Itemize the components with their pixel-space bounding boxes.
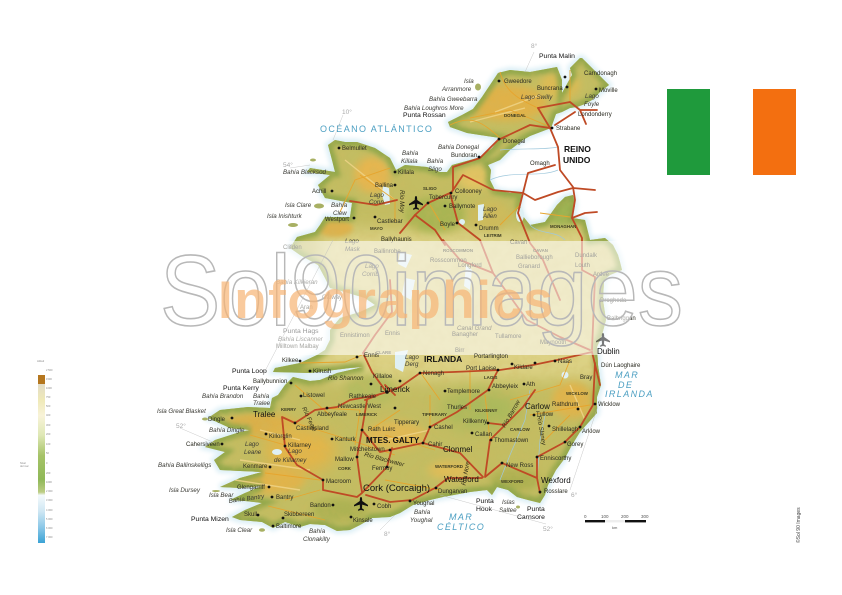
Midlands and south labels: Bandon (310, 503, 331, 509)
Midlands and south labels: Kenmare (243, 464, 268, 470)
cities and bays of the north: Arranmore (441, 86, 472, 93)
legend: elevation scale: 1000 (46, 386, 52, 390)
Midlands and south labels: Gorey (567, 442, 583, 448)
faded labels: Ballinrobe (374, 249, 401, 255)
Midlands and south labels: Bahía Bantry (228, 493, 266, 505)
land cover fade band (150, 241, 630, 355)
Midlands and south labels: Waterford (444, 475, 479, 484)
cities and bays of the north: Río Moy (398, 190, 405, 214)
Midlands and south labels: 52° (543, 525, 553, 533)
cities and bays of the north: UNIDO (563, 155, 591, 165)
Midlands and south labels: Abbeyfeale (317, 412, 348, 418)
Midlands and south labels: 6° (571, 491, 578, 499)
faded labels (276, 238, 636, 355)
cities and bays of the north: Sligo (428, 166, 442, 173)
cities and bays of the north: Bahía Donegal (438, 144, 480, 151)
cities and bays of the north: Castlebar (377, 219, 403, 225)
Midlands and south labels: Punta Mizen (191, 516, 229, 523)
Midlands and south labels: Bantry (276, 495, 293, 501)
legend: elevation scale: 100 (46, 442, 51, 446)
map: Ireland physical map (200, 50, 630, 540)
faded labels: Birr (455, 348, 464, 354)
cities and bays of the north: Buncrana (537, 86, 563, 92)
cities and bays of the north: Lago (483, 206, 497, 213)
Midlands and south labels: LIMERICK (356, 412, 378, 417)
Midlands and south labels: Kanturk (335, 437, 357, 443)
Midlands and south labels: Dublin (597, 347, 620, 356)
Midlands and south labels: Punta (527, 506, 545, 513)
legend: elevation scale: 4 000 (46, 508, 53, 512)
Midlands and south labels: Dungarvan (438, 489, 467, 495)
cities and bays of the north: Gweedore (504, 79, 532, 85)
Midlands and south labels: New Ross (506, 463, 533, 469)
faded labels: Tullamore (495, 334, 522, 340)
legend: elevation scale: 1000 (46, 480, 52, 484)
Midlands and south labels: Wicklow (598, 402, 621, 408)
water labels: MAR (449, 512, 473, 522)
Midlands and south labels: Bahía Brandon (202, 393, 244, 400)
Midlands and south labels: Youghal (413, 501, 434, 507)
faded labels: Cavan (510, 240, 527, 246)
legend: elevation scale (20, 359, 53, 543)
land relief (200, 50, 630, 540)
Midlands and south labels: Macroom (326, 479, 351, 485)
cities and bays of the north: DONEGAL (504, 113, 526, 118)
Midlands and south labels: Lago (288, 448, 302, 455)
Midlands and south labels: Isla Clear (226, 527, 253, 534)
cities and bays of the north: REINO (564, 144, 591, 154)
water labels (320, 124, 654, 532)
Midlands and south labels: Bahía (414, 509, 431, 516)
Midlands and south labels: Bray (580, 375, 592, 381)
Midlands and south labels: Carnsore (517, 514, 545, 521)
cities and bays of the north: Clew (333, 210, 347, 217)
Midlands and south labels: Newcastle West (338, 404, 381, 410)
cities and bays of the north: Ballyhaunis (381, 237, 412, 243)
Midlands and south labels: TIPPERARY (422, 412, 447, 417)
Midlands and south labels: Shillelagh (552, 427, 578, 433)
cities and bays of the north: LEITRIM (484, 233, 502, 238)
islands (202, 84, 520, 532)
faded labels: Lago (345, 238, 359, 245)
Midlands and south labels: CORK (338, 466, 352, 471)
faded labels: CLARE (376, 350, 391, 355)
Midlands and south labels: Bahía (253, 393, 270, 400)
Midlands and south labels: Fermoy (372, 466, 392, 472)
Midlands and south labels: Isla Bear (209, 492, 234, 499)
cities and bays of the north: Donegal (503, 139, 525, 145)
scale bar: 0 (584, 514, 587, 519)
cities and bays of the north: Belmullet (342, 146, 367, 152)
Midlands and south labels: Rosslare (544, 489, 568, 495)
Midlands and south labels: Listowel (303, 393, 325, 399)
cities and bays of the north: Omagh (530, 161, 550, 167)
faded labels: Clifden (283, 245, 302, 251)
faded labels: Banagher (452, 332, 478, 338)
Midlands and south labels: Isla Great Blasket (157, 408, 206, 415)
Midlands and south labels: Thomastown (494, 438, 528, 444)
faded labels: Ennis (385, 331, 400, 337)
Midlands and south labels: Arklow (582, 429, 601, 435)
cities and bays of the north: Allen (482, 213, 497, 220)
Midlands and south labels: Bahía (309, 528, 326, 535)
cities and bays of the north: Isla (464, 78, 474, 85)
cities and bays of the north: Ballymote (449, 204, 476, 210)
Midlands and south labels: Callan (475, 432, 492, 438)
cities and bays of the north: Bahía (427, 158, 444, 165)
legend: elevation scale: 2 000 (46, 489, 53, 493)
cities and bays of the north: Lago (585, 93, 599, 100)
Midlands and south labels: Cashel (434, 425, 453, 431)
Midlands and south labels: Río Nore (460, 460, 472, 486)
Midlands and south labels: Tralee (253, 410, 276, 419)
legend: elevation scale: 7 000 (46, 535, 53, 539)
Midlands and south labels: 52° (176, 422, 186, 430)
Midlands and south labels: Islas (502, 499, 515, 506)
legend: elevation scale: del mar (20, 464, 29, 468)
Midlands and south labels: Skull (244, 512, 257, 518)
Midlands and south labels (157, 347, 641, 543)
Midlands and south labels: Ennis (364, 353, 379, 359)
faded labels: Mask (345, 246, 361, 253)
faded labels: Ennistimon (340, 333, 370, 339)
Midlands and south labels: Naas (558, 359, 572, 365)
legend: elevation scale: 500 (46, 404, 51, 408)
Midlands and south labels: Derg (405, 361, 419, 368)
Midlands and south labels: Thurles (447, 405, 467, 411)
scale bar: km (612, 525, 618, 530)
Midlands and south labels: Castleisland (296, 426, 329, 432)
legend: elevation scale: 1500 (46, 377, 52, 381)
watermark: Sol90images outline: Sol90images (160, 235, 683, 347)
Midlands and south labels: Nenagh (423, 371, 444, 377)
Midlands and south labels: Tipperary (394, 420, 419, 426)
legend: elevation scale: Altitud (37, 359, 45, 363)
cities and bays of the north: Bahía Blacksod (283, 169, 327, 176)
faded labels: Balbriggan (607, 316, 636, 322)
Midlands and south labels: Cork (Corcaigh) (363, 483, 430, 494)
Midlands and south labels: Glengarriff (237, 485, 265, 491)
Midlands and south labels: Kilrush (313, 369, 331, 375)
Midlands and south labels: Lago (405, 354, 419, 361)
Midlands and south labels: Isla Dursey (169, 487, 201, 494)
scale bar (584, 514, 649, 530)
Midlands and south labels: Rathdrum (552, 402, 578, 408)
Midlands and south labels: Dingle (208, 417, 226, 423)
Midlands and south labels: Cobh (377, 504, 391, 510)
Midlands and south labels: Port Laoise (466, 366, 497, 372)
faded labels: Drogheda (600, 298, 627, 304)
cities and bays of the north: Collooney (455, 189, 482, 195)
Midlands and south labels: KERRY (281, 407, 296, 412)
faded labels: Galway (322, 295, 342, 301)
legend: elevation scale: 3 000 (46, 498, 53, 502)
Midlands and south labels: Punta (476, 498, 494, 505)
Midlands and south labels: Youghal (410, 517, 433, 524)
legend: elevation scale: Nivel (20, 461, 26, 465)
cities and bays of the north: Punta Malin (539, 53, 575, 60)
graticule lines (180, 52, 600, 530)
cities and bays of the north: Isla Clare (285, 202, 312, 209)
legend: elevation scale: 2 500 (46, 368, 53, 372)
Midlands and south labels: Rathkeale (349, 394, 377, 400)
cities and bays of the north: Londonderry (578, 112, 612, 118)
icon: airports (354, 196, 610, 511)
faded labels: CAVAN (533, 248, 548, 253)
cities and bays of the north: Bahía (402, 150, 419, 157)
faded labels: Granard (518, 264, 540, 270)
Midlands and south labels: WICKLOW (566, 391, 589, 396)
water labels: MAR (615, 370, 639, 380)
Midlands and south labels: 8° (384, 530, 391, 538)
Midlands and south labels: Río Feale (300, 406, 318, 433)
scale bar: 100 (601, 514, 609, 519)
cities and bays of the north: MAYO (370, 226, 383, 231)
main roads (282, 102, 600, 502)
Midlands and south labels: Tralee (253, 400, 271, 407)
Midlands and south labels: Abbeyleix (492, 384, 518, 390)
water labels: OCÉANO ATLÁNTICO (320, 124, 433, 134)
cities and bays of the north: Moville (599, 88, 618, 94)
Midlands and south labels: Clonakilty (303, 536, 331, 543)
Midlands and south labels: Cahir (428, 442, 442, 448)
place labels: north and west (150, 42, 654, 543)
legend: elevation scale: 200 (46, 432, 51, 436)
cities and bays of the north: Tobercurry (429, 195, 457, 201)
Midlands and south labels: Ballybunnion (253, 379, 287, 385)
Midlands and south labels: Cahersiveen (186, 442, 220, 448)
cities and bays of the north: Achill (312, 189, 326, 195)
cities and bays of the north: Conn (369, 199, 384, 206)
faded labels: Longford (458, 263, 482, 269)
faded labels: Punta Hags (283, 328, 319, 335)
Midlands and south labels: Tullow (536, 412, 554, 418)
Midlands and south labels: Killaloe (373, 374, 393, 380)
cities and bays of the north: Lago Swilly (521, 94, 553, 101)
Midlands and south labels: Ath (526, 382, 535, 388)
water labels: DE (618, 380, 633, 390)
faded labels: Louth (575, 263, 590, 269)
Midlands and south labels: Río Shannon (328, 375, 364, 382)
cities and bays of the north: MONAGHAN (550, 224, 576, 229)
credit: ©Sol 90 Images (795, 507, 802, 543)
Midlands and south labels: Hook (476, 506, 492, 513)
cities and bays of the north: SLIGO (423, 186, 437, 191)
cities and bays of the north: Punta Rossan (403, 112, 446, 119)
cities and bays of the north: Bahía (331, 202, 348, 209)
cities and bays of the north: Bahía Loughros More (404, 105, 464, 112)
Midlands and south labels: Río Slaney (535, 415, 547, 447)
faded labels: Ballieborough (516, 255, 553, 261)
Midlands and south labels: Baltimore (276, 524, 302, 530)
Midlands and south labels: Portarlington (474, 354, 508, 360)
Midlands and south labels: CARLOW (510, 427, 531, 432)
Midlands and south labels: Rath Luirc (368, 427, 395, 433)
Midlands and south labels: MTES. GALTY (366, 436, 420, 445)
faded labels: Ardee (593, 272, 610, 278)
cities and bays of the north: 8° (531, 42, 538, 50)
cities and bays of the north: Killala (398, 170, 415, 176)
coastal water halo (205, 58, 622, 531)
Midlands and south labels: Saltee (499, 507, 517, 514)
Midlands and south labels: Killorglin (269, 434, 292, 440)
cities and bays of the north: Bundoran (451, 153, 477, 159)
Midlands and south labels: Mitchelstown (350, 447, 385, 453)
cities and bays of the north: Boyle (440, 222, 456, 228)
cities and bays of the north: Killala (401, 158, 418, 165)
Midlands and south labels: Leane (244, 449, 262, 456)
cities and bays of the north: 54° (283, 161, 293, 169)
legend: elevation scale: 750 (46, 395, 51, 399)
cities and bays of the north: Westport (325, 217, 349, 223)
watermark: Infographics: Infographics (218, 271, 553, 330)
Midlands and south labels: IRLANDA (424, 354, 462, 364)
Midlands and south labels: Punta Loop (232, 368, 267, 375)
city dots (221, 76, 597, 527)
Midlands and south labels: Templemore (447, 389, 481, 395)
Midlands and south labels: Dún Laoghaire (601, 363, 641, 369)
Midlands and south labels: Limerick (380, 385, 411, 394)
Midlands and south labels: WEXFORD (501, 479, 523, 484)
faded labels: Corrib (362, 271, 379, 278)
rivers (490, 147, 565, 480)
cities and bays of the north: Strabane (556, 126, 581, 132)
Midlands and south labels: Río Blackwater (363, 451, 406, 469)
Midlands and south labels: de Killarney (274, 457, 307, 464)
legend: elevation scale: 6 000 (46, 526, 53, 530)
Midlands and south labels: Punta Kerry (223, 385, 259, 392)
legend: elevation scale: 300 (46, 423, 51, 427)
faded labels: Rosscommon (430, 258, 467, 264)
Midlands and south labels: Enniscorthy (540, 456, 571, 462)
cities and bays of the north: Ballina (375, 183, 394, 189)
Midlands and south labels: Killarney (288, 443, 311, 449)
faded labels: Bahía Kilkieran (276, 279, 318, 286)
water labels: CÉLTICO (437, 522, 485, 532)
Midlands and south labels: Bahía Dingle (209, 427, 245, 434)
water labels: IRLANDA (605, 389, 654, 399)
cities and bays of the north: Carndonagh (584, 71, 617, 77)
scale bar: 300 (641, 514, 649, 519)
faded labels: Aran (300, 305, 313, 311)
cities and bays of the north: Drumm (479, 226, 499, 232)
legend: elevation scale: 50 (46, 451, 49, 455)
Midlands and south labels: Mallow (335, 457, 354, 463)
Midlands and south labels: Skibbereen (284, 512, 314, 518)
Midlands and south labels: Lago (245, 441, 259, 448)
Midlands and south labels: Río Barrow (501, 399, 522, 429)
cities and bays of the north: Lago (370, 192, 384, 199)
legend: elevation scale: 200 (46, 471, 51, 475)
faded labels: Bahía Liscanner (278, 336, 324, 343)
faded labels: Canal Grand (457, 325, 492, 332)
Midlands and south labels: Bahía Ballinskelligs (158, 462, 211, 469)
Midlands and south labels: WATERFORD (435, 464, 463, 469)
flag of Ireland (667, 89, 796, 175)
cities and bays of the north: Foyle (584, 101, 600, 108)
cities and bays of the north: Isla Inishturk (267, 213, 303, 220)
Midlands and south labels: LAOIS (484, 375, 497, 380)
faded labels: Lago (365, 263, 379, 270)
legend: elevation scale: 400 (46, 413, 51, 417)
faded labels: Maynooth (540, 340, 566, 346)
faded labels: Dundalk (575, 253, 598, 259)
cities and bays of the north: Bahía Gweebarra (429, 96, 478, 103)
Midlands and south labels: KILKENNY (475, 408, 498, 413)
Midlands and south labels: Carlow (525, 402, 550, 411)
secondary roads (250, 70, 590, 520)
scale bar: 200 (621, 514, 629, 519)
lakes (272, 186, 568, 455)
cities and bays of the north: 10° (342, 108, 352, 116)
cities and bays of the north (267, 42, 618, 243)
Midlands and south labels: Kildare (514, 365, 533, 371)
faded labels: ROSCOMMON (443, 248, 473, 253)
Midlands and south labels: Kinsale (353, 518, 373, 524)
Midlands and south labels: Kilkee (282, 358, 299, 364)
faded labels: Milltown Malbay (276, 344, 319, 350)
Midlands and south labels: Killkenny (463, 419, 487, 425)
Midlands and south labels: Clonmel (443, 445, 473, 454)
legend: elevation scale: 0 (46, 461, 48, 465)
legend: elevation scale: 5 000 (46, 517, 53, 521)
Midlands and south labels: Wexford (541, 476, 571, 485)
